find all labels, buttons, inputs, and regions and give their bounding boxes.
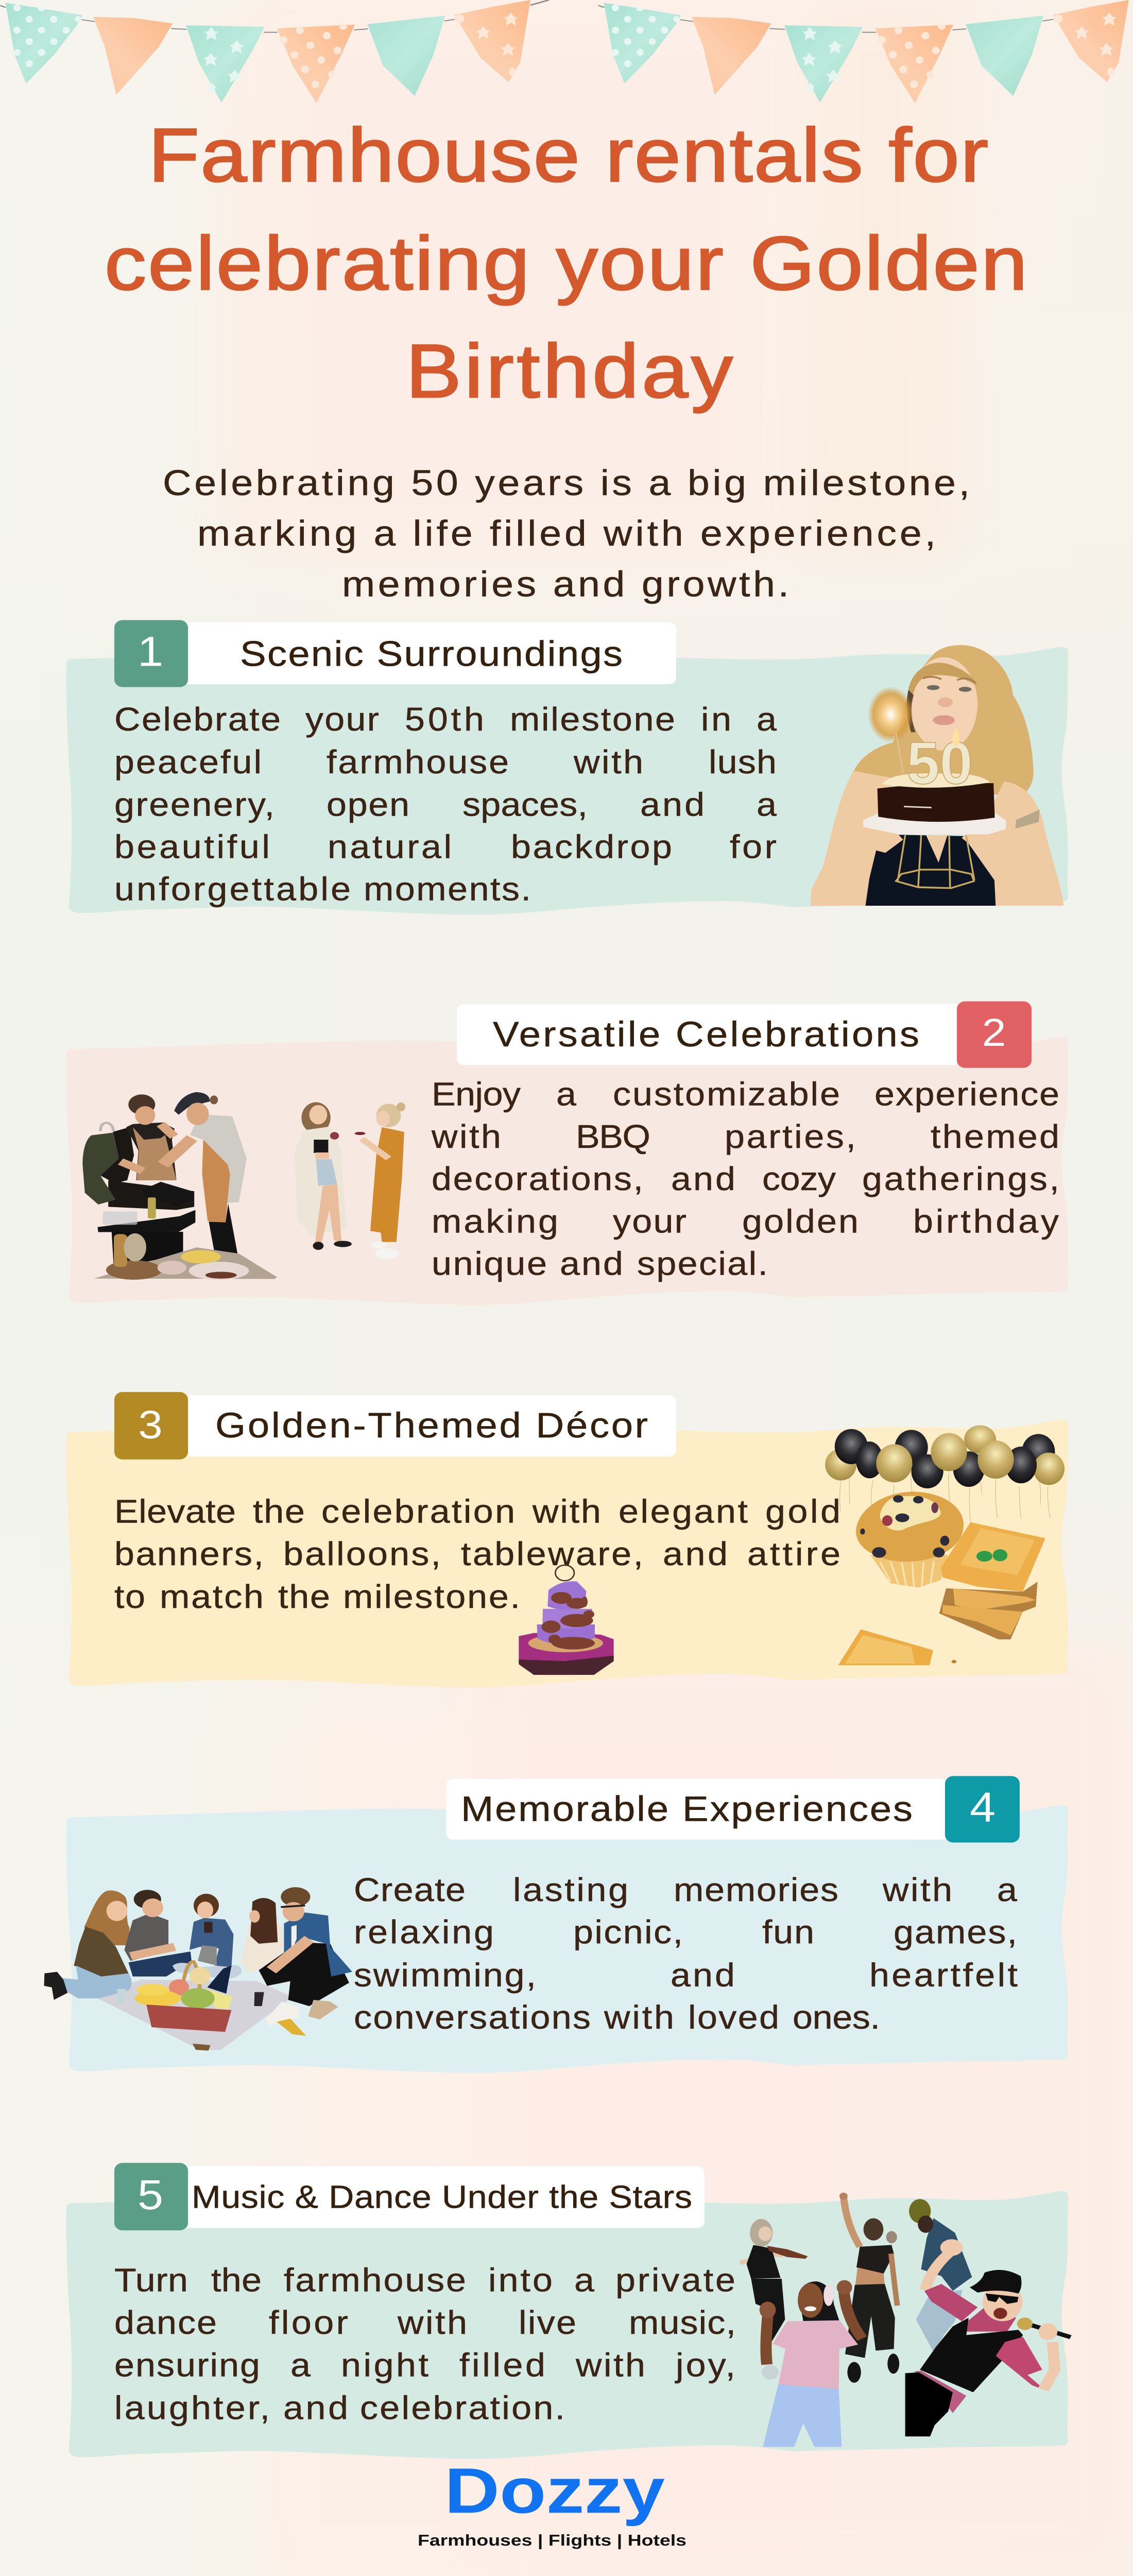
body text 3 bbox=[114, 1493, 840, 1615]
body text 2: a bbox=[556, 1076, 577, 1113]
heading label 3 bbox=[114, 1392, 676, 1460]
body text 3: match bbox=[160, 1579, 264, 1615]
body text 2: and bbox=[560, 1245, 623, 1282]
body text 2: golden bbox=[742, 1204, 859, 1240]
body text 5: floor bbox=[269, 2304, 348, 2341]
body text 2: gatherings, bbox=[862, 1161, 1059, 1197]
title: Birthday bbox=[406, 329, 733, 413]
heading label 2: 2 bbox=[982, 1011, 1006, 1055]
body text 2: with bbox=[431, 1118, 501, 1155]
image: woman blowing out 50 candles on cake bbox=[811, 645, 1063, 906]
body text 3: the bbox=[253, 1493, 305, 1530]
body text 1: your bbox=[305, 701, 379, 738]
title bbox=[105, 113, 1027, 413]
body text 3: banners, bbox=[114, 1536, 264, 1572]
heading label 5 bbox=[114, 2163, 705, 2230]
heading label 3: Golden-Themed Décor bbox=[215, 1405, 648, 1445]
body text 2: customizable bbox=[613, 1076, 840, 1113]
body text 3: tableware, bbox=[461, 1536, 643, 1572]
body text 5: filled bbox=[459, 2347, 545, 2384]
body text 2 bbox=[431, 1076, 1059, 1282]
singer with microphone bbox=[905, 2239, 1071, 2436]
body text 5: laughter, bbox=[114, 2389, 270, 2427]
heading label 1 bbox=[114, 620, 676, 687]
body text 1 bbox=[114, 701, 777, 908]
body text 5: with bbox=[397, 2304, 467, 2341]
body text 4: heartfelt bbox=[869, 1957, 1018, 1994]
image: two women with wine bbox=[295, 1102, 405, 1259]
body text 4: a bbox=[997, 1872, 1018, 1908]
body text 2: experience bbox=[874, 1076, 1059, 1113]
body text 5: a bbox=[574, 2262, 595, 2299]
body text 1: lush bbox=[709, 744, 777, 781]
body text 4: fun bbox=[762, 1914, 814, 1951]
image: woman blowing out 50 candles on cake: 50 bbox=[906, 729, 973, 796]
body text 1: moments. bbox=[364, 871, 531, 908]
body text 1: spaces, bbox=[462, 787, 588, 823]
body text 2: and bbox=[671, 1161, 735, 1197]
body text 3: milestone. bbox=[343, 1579, 520, 1615]
heading label 4: Memorable Experiences bbox=[461, 1789, 913, 1829]
panel background 2 bbox=[66, 1037, 1068, 1305]
woman with raised fist bbox=[839, 2193, 899, 2383]
body text 5: live bbox=[519, 2304, 576, 2341]
heading label 2: Versatile Celebrations bbox=[493, 1014, 919, 1054]
body text 4: and bbox=[671, 1957, 735, 1994]
image: purple tiered cake bbox=[519, 1565, 614, 1675]
bunting garland bbox=[0, 0, 1129, 103]
heading label 1: Scenic Surroundings bbox=[240, 634, 623, 674]
balloon strings bbox=[840, 1468, 1050, 1525]
panel background 3 bbox=[66, 1419, 1068, 1687]
body text 4: lasting bbox=[513, 1872, 628, 1908]
body text 1: with bbox=[573, 744, 643, 781]
body text 3: balloons, bbox=[283, 1536, 441, 1572]
body text 2: decorations, bbox=[432, 1161, 643, 1197]
violinist bbox=[740, 2219, 808, 2380]
body text 1: peaceful bbox=[114, 744, 262, 781]
body text 5: and bbox=[283, 2389, 348, 2427]
body text 2: Enjoy bbox=[432, 1076, 521, 1113]
body text 5: night bbox=[341, 2347, 428, 2384]
body text 3: attire bbox=[747, 1536, 840, 1572]
tagline: Farmhouses | Flights | Hotels bbox=[418, 2531, 686, 2549]
body text 3: Elevate bbox=[114, 1493, 236, 1530]
intro text: marking a life filled with experience, bbox=[197, 513, 936, 553]
body text 2: BBQ bbox=[576, 1118, 650, 1155]
body text 4: picnic, bbox=[573, 1914, 683, 1951]
intro text: Celebrating 50 years is a big milestone, bbox=[163, 462, 970, 503]
body text 4: with bbox=[604, 1999, 674, 2036]
body text 2: themed bbox=[931, 1118, 1059, 1155]
logo: Dozzy: Dozzy bbox=[444, 2454, 665, 2527]
panel: golden-themed decor bbox=[66, 1392, 1068, 1687]
body text 5: the bbox=[211, 2262, 262, 2299]
body text 3: gold bbox=[765, 1493, 840, 1530]
body text 2: cozy bbox=[762, 1161, 836, 1197]
body text 5: private bbox=[615, 2262, 735, 2299]
panel: music and dance bbox=[66, 2163, 1071, 2459]
body text 4: ones. bbox=[793, 1999, 880, 2036]
panel: memorable experiences bbox=[44, 1776, 1068, 2073]
body text 5: ensuring bbox=[114, 2347, 260, 2384]
body text 3: celebration bbox=[321, 1493, 515, 1530]
body text 2: special. bbox=[637, 1245, 768, 1282]
heading label 5: Music & Dance Under the Stars bbox=[192, 2179, 692, 2215]
body text 4: with bbox=[882, 1872, 952, 1908]
image: musicians and dancers bbox=[740, 2193, 1071, 2447]
body text 5 bbox=[114, 2262, 736, 2427]
image: friends having a picnic bbox=[44, 1887, 352, 2050]
body text 1: milestone bbox=[510, 701, 675, 738]
body text 3: to bbox=[114, 1579, 145, 1615]
body text 3: with bbox=[532, 1493, 601, 1530]
heading label 3: 3 bbox=[138, 1402, 163, 1447]
body text 1: farmhouse bbox=[327, 744, 509, 781]
body text 5: music, bbox=[629, 2304, 736, 2341]
heading label 1: 1 bbox=[138, 628, 163, 675]
body text 1: Celebrate bbox=[114, 701, 281, 738]
body text 4: conversations bbox=[354, 1999, 591, 2036]
image: balloons, muffin and pastries bbox=[825, 1426, 1065, 1665]
body text 1: in bbox=[701, 701, 731, 738]
body text 2: birthday bbox=[913, 1204, 1059, 1240]
body text 4 bbox=[354, 1872, 1018, 2036]
body text 1: natural bbox=[328, 828, 452, 866]
panel: versatile celebrations bbox=[66, 1002, 1068, 1305]
man in denim bbox=[909, 2199, 972, 2354]
body text 1: 50th bbox=[405, 701, 484, 738]
intro text bbox=[163, 462, 970, 604]
body text 1: beautiful bbox=[114, 828, 270, 866]
body text 5: dance bbox=[114, 2304, 217, 2341]
body text 2: unique bbox=[432, 1245, 547, 1282]
image: two men at a barbecue grill bbox=[82, 1092, 405, 1280]
body text 2: making bbox=[432, 1204, 558, 1240]
pastries bbox=[838, 1522, 1045, 1665]
body text 1: a bbox=[757, 701, 777, 738]
title: Farmhouse rentals for bbox=[148, 113, 988, 197]
title: celebrating your Golden bbox=[105, 221, 1027, 306]
body text 4: games, bbox=[894, 1914, 1017, 1951]
body text 5: celebration. bbox=[360, 2389, 565, 2427]
body text 1: for bbox=[730, 828, 777, 866]
body text 5: farmhouse bbox=[284, 2262, 466, 2299]
muffin bbox=[856, 1492, 964, 1587]
body text 2: your bbox=[613, 1204, 686, 1240]
body text 1: and bbox=[640, 787, 705, 823]
body text 5: with bbox=[575, 2347, 645, 2384]
body text 5: into bbox=[488, 2262, 553, 2299]
body text 4: Create bbox=[354, 1872, 466, 1908]
body text 5: a bbox=[290, 2347, 311, 2384]
girl with headphones bbox=[760, 2280, 862, 2447]
body text 1: backdrop bbox=[511, 828, 672, 866]
heading label 4: 4 bbox=[970, 1784, 995, 1831]
body text 1: a bbox=[757, 787, 777, 823]
panel: scenic surroundings bbox=[66, 620, 1068, 914]
body text 1: greenery, bbox=[114, 787, 274, 823]
heading label 4 bbox=[446, 1776, 1020, 1842]
body text 5: joy, bbox=[675, 2347, 735, 2384]
body text 5: Turn bbox=[114, 2262, 188, 2299]
body text 4: memories bbox=[674, 1872, 838, 1908]
body text 1: open bbox=[327, 787, 409, 823]
panel background 4 bbox=[66, 1805, 1068, 2073]
body text 4: swimming, bbox=[354, 1957, 536, 1994]
body text 3: and bbox=[663, 1536, 728, 1572]
body text 4: relaxing bbox=[354, 1914, 494, 1951]
body text 2: parties, bbox=[725, 1118, 856, 1155]
body text 1: unforgettable bbox=[114, 871, 351, 908]
heading label 5: 5 bbox=[138, 2172, 163, 2218]
intro text: memories and growth. bbox=[342, 564, 789, 604]
body text 3: elegant bbox=[619, 1493, 748, 1530]
panel background 1 bbox=[66, 647, 1068, 914]
body text 4: loved bbox=[688, 1999, 779, 2036]
panel background 5 bbox=[66, 2191, 1068, 2459]
heading label 2 bbox=[457, 1002, 1032, 1068]
body text 3: the bbox=[278, 1579, 330, 1615]
